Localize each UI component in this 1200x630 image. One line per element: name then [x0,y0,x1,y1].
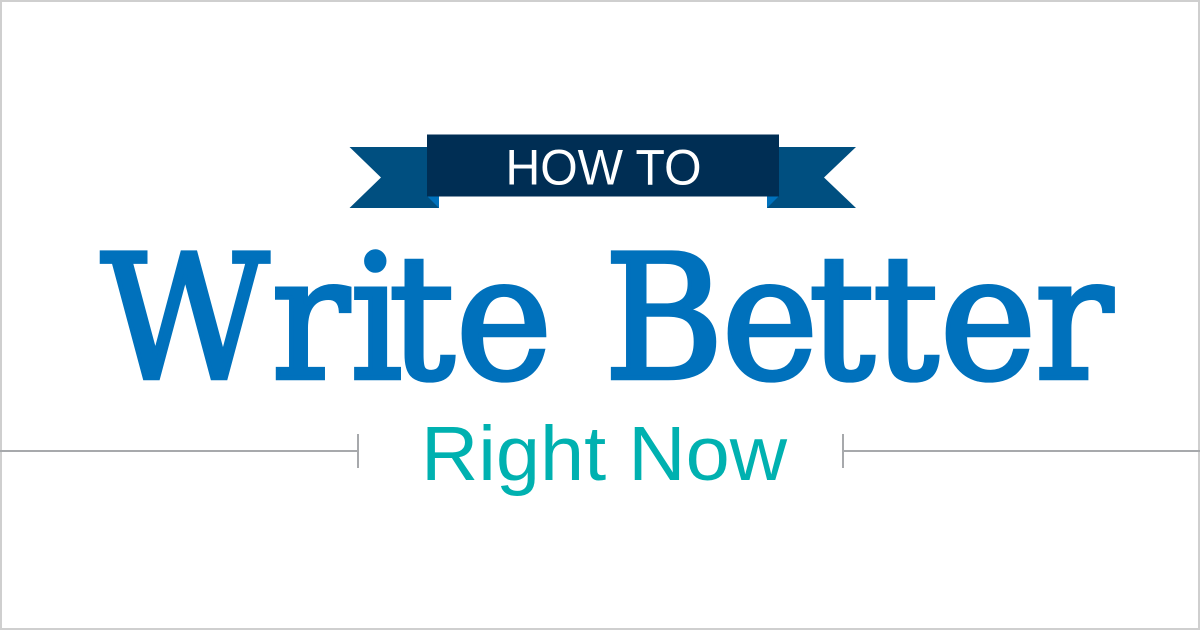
ribbon left tail [350,147,439,208]
main title: Write Better [101,218,1114,419]
right divider [842,434,1200,468]
ribbon centre band [427,134,779,196]
ribbon right tail [767,147,856,208]
ribbon banner [350,134,856,208]
ribbon right fold [767,196,779,208]
ribbon label: HOW TO [506,140,702,196]
ribbon left fold [427,196,439,208]
subtitle: Right Now [421,411,787,497]
left divider [0,434,359,468]
